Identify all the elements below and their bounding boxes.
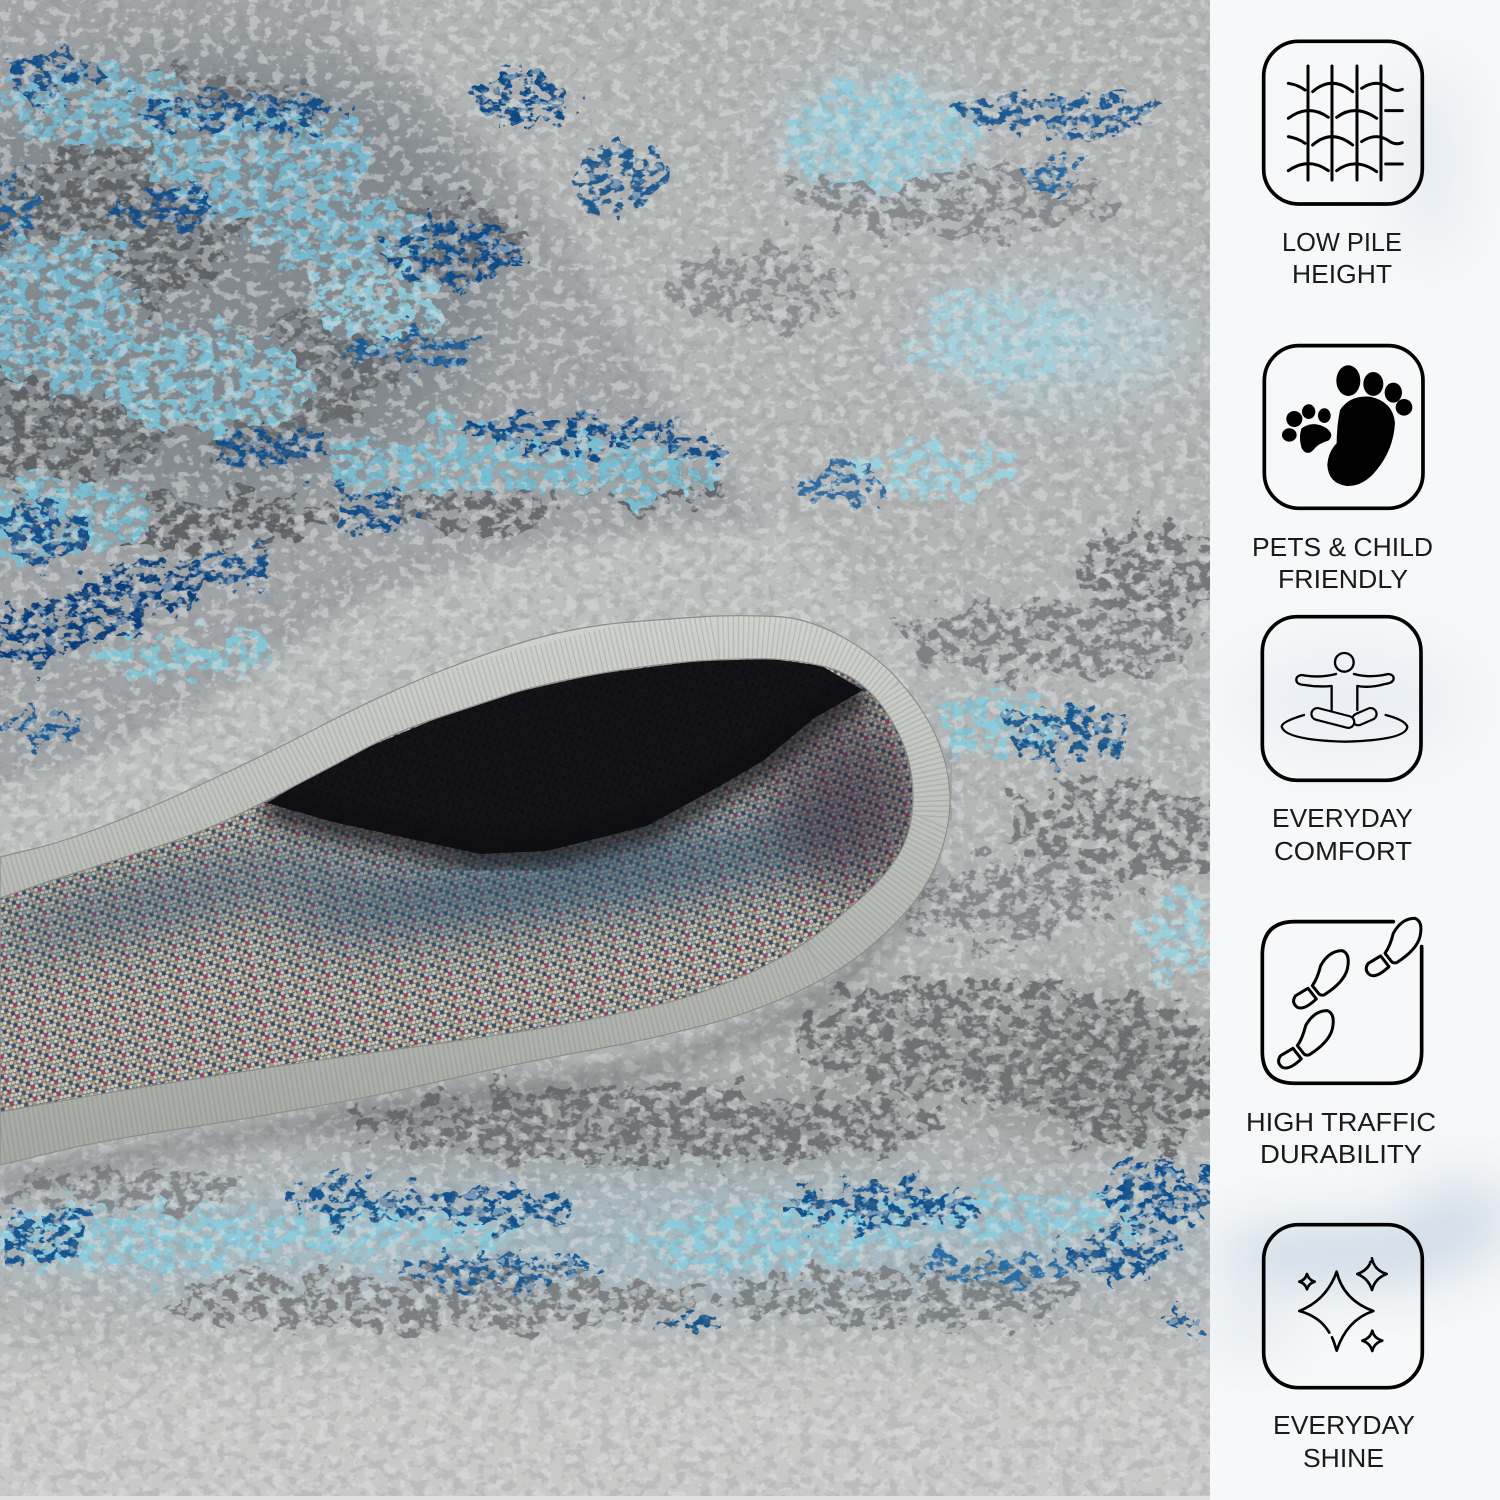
panel: feature sidebar — [1210, 0, 1500, 1500]
label: low pile height: LOW PILE — [1282, 227, 1402, 257]
carpet pattern: right and bottom field — [0, 74, 1230, 1335]
label: everyday shine: EVERYDAY — [1273, 1410, 1415, 1440]
feature: everyday comfort — [1262, 617, 1421, 866]
icon: footprints — [1262, 918, 1422, 1083]
rug binding edge — [0, 616, 950, 1165]
shadow under the roll — [0, 860, 935, 1185]
bottom fringe line — [0, 1496, 1210, 1500]
dark inner shadow — [267, 690, 863, 854]
feature: low pile height — [1264, 41, 1422, 289]
label: high traffic durability: DURABILITY — [1260, 1139, 1422, 1169]
feature: everyday shine — [1264, 1225, 1422, 1473]
label: everyday shine: SHINE — [1303, 1443, 1384, 1473]
icon: woven pile — [1264, 41, 1422, 204]
label: everyday comfort: EVERYDAY — [1272, 803, 1413, 833]
rug underside weave — [0, 640, 930, 1130]
plain pale band above the edge — [0, 518, 919, 856]
label: everyday comfort: COMFORT — [1274, 836, 1412, 866]
icon: seated figure on mat — [1262, 617, 1421, 780]
icon: foot and paw — [1264, 346, 1423, 508]
label: low pile height: HEIGHT — [1292, 259, 1392, 289]
label: pets and child friendly: PETS & CHILD — [1252, 532, 1433, 562]
grey mottling on the fold — [0, 67, 730, 550]
rolled rug top surface — [0, 0, 952, 856]
label: pets and child friendly: FRIENDLY — [1278, 564, 1408, 594]
icon: sparkles — [1264, 1225, 1422, 1388]
feature: high traffic durability — [1246, 918, 1436, 1169]
feature: pets and child friendly — [1252, 346, 1433, 594]
label: high traffic durability: HIGH TRAFFIC — [1246, 1107, 1436, 1137]
soft shade along the roll silhouette — [350, 0, 952, 750]
